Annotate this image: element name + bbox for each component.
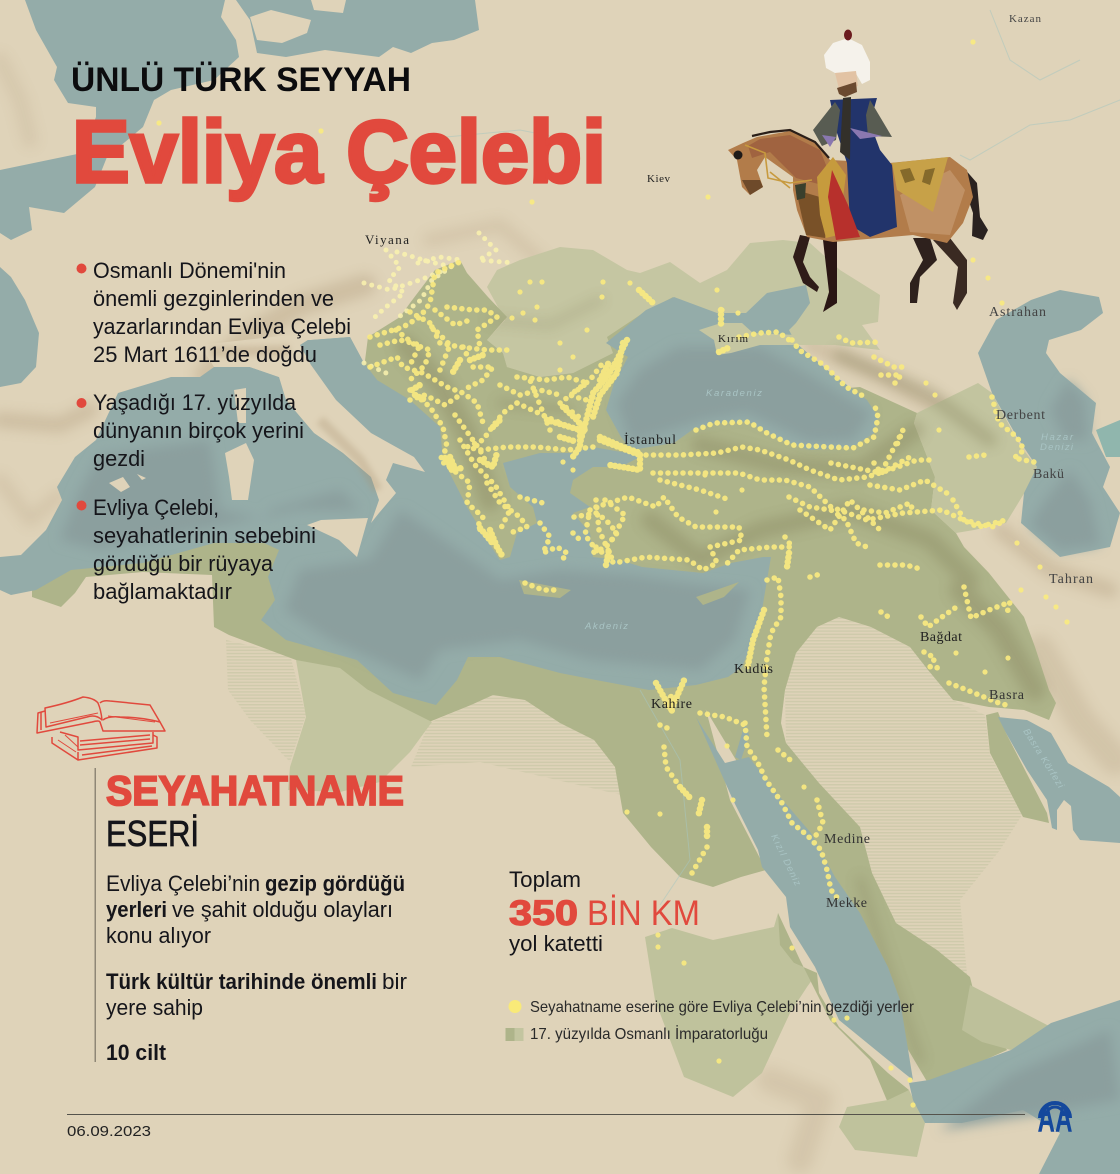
label: Basra Körfezi: Basra Körfezi xyxy=(1020,727,1066,791)
label: Hazar: Hazar xyxy=(1041,432,1074,443)
callout: total distance: 350 xyxy=(509,894,578,933)
label: Bağdat: Bağdat xyxy=(920,630,962,645)
bullet one xyxy=(93,258,351,367)
label: Akdeniz: Akdeniz xyxy=(584,621,628,632)
bullet two: dünyanın birçok yerini xyxy=(93,418,304,443)
text block: biography bullets xyxy=(76,258,351,604)
rivers and small lakes xyxy=(415,10,1120,905)
Libyan interior xyxy=(288,660,432,792)
turban cap xyxy=(844,30,852,40)
callout: total distance: Toplam xyxy=(509,867,581,892)
label: İstanbul: İstanbul xyxy=(624,432,676,448)
Caspian Sea xyxy=(978,290,1120,557)
divider: vertical rule xyxy=(94,768,96,1062)
date: 06.09.2023 xyxy=(67,1123,151,1140)
bridle xyxy=(745,145,812,188)
dotted routes xyxy=(370,262,1039,900)
label: Mekke: Mekke xyxy=(826,896,867,911)
heading: ESERİ: ESERİ xyxy=(106,813,199,854)
label: Basra: Basra xyxy=(989,688,1025,703)
bullet one: önemli gezginlerinden ve xyxy=(93,286,334,311)
Baltic Sea xyxy=(236,0,479,57)
Caucasus lighter zone xyxy=(914,383,1037,533)
terrain shading on empire xyxy=(405,300,1035,1060)
text block: Seyahatname description xyxy=(106,871,407,1065)
label: Viyana: Viyana xyxy=(365,232,409,247)
label: Tahran: Tahran xyxy=(1049,572,1093,587)
text block: Seyahatname description: ve şahit olduğu olayları xyxy=(172,897,393,922)
front legs xyxy=(793,235,819,292)
label: Kiev: Kiev xyxy=(647,173,670,185)
Mediterranean Sea xyxy=(0,337,771,705)
stripes: desert hatching xyxy=(226,617,1022,985)
bullet one: 25 Mart 1611’de doğdu xyxy=(93,342,317,367)
beard xyxy=(837,82,857,97)
tail xyxy=(963,167,988,240)
turban xyxy=(824,38,870,84)
bullet two: Yaşadığı 17. yüzyılda xyxy=(93,390,297,415)
text block: Seyahatname description: 10 cilt xyxy=(106,1040,167,1065)
legend: empire swatch xyxy=(506,1028,524,1041)
North Sea and Channel xyxy=(0,0,239,240)
Bay of Biscay xyxy=(0,267,39,387)
text block: Seyahatname description: yerleri xyxy=(106,897,167,922)
bullet one: Osmanlı Dönemi'nin xyxy=(93,258,286,283)
heading: SEYAHATNAME: SEYAHATNAME xyxy=(106,767,404,814)
bullet one: yazarlarından Evliya Çelebi xyxy=(93,314,351,339)
hind legs xyxy=(910,238,937,303)
bullet two xyxy=(93,390,304,471)
face xyxy=(835,71,858,93)
sash xyxy=(840,97,851,160)
Somaliland xyxy=(839,1090,925,1157)
blanket xyxy=(892,157,948,212)
legend: yellow dot label: Seyahatname eserine göre Evliya Çelebi’nin gezdiği yerler xyxy=(530,999,915,1016)
icon: books xyxy=(37,697,165,760)
North Africa coast xyxy=(32,530,766,887)
label: Denizi: Denizi xyxy=(1040,442,1074,453)
single scattered points xyxy=(159,42,1067,1105)
legend: empire label: 17. yüzyılda Osmanlı İmparatorluğu xyxy=(530,1024,768,1043)
bullet three: gördüğü bir rüyaya xyxy=(93,551,274,576)
logo: Anadolu Agency: AA xyxy=(1038,1098,1072,1141)
label: Medine: Medine xyxy=(824,832,870,847)
saddle xyxy=(817,157,846,238)
eye xyxy=(734,150,742,160)
land over water: Italy, islands xyxy=(109,0,425,557)
callout: total distance xyxy=(509,867,700,956)
Yemen xyxy=(962,985,1051,1050)
label: Bakü: Bakü xyxy=(1033,467,1064,482)
bullet marker xyxy=(76,398,86,408)
bullet three: seyahatlerinin sebebini xyxy=(93,523,316,548)
horse body xyxy=(728,131,973,243)
left sleeve xyxy=(813,102,840,146)
text block: Seyahatname description: gezip gördüğü xyxy=(265,871,405,896)
Gulf of Aqaba xyxy=(735,723,749,760)
title: subheading: ÜNLÜ TÜRK SEYYAH xyxy=(71,61,411,99)
label: Karadeniz: Karadeniz xyxy=(706,388,762,399)
bullet marker xyxy=(76,500,86,510)
label: Derbent: Derbent xyxy=(996,408,1045,423)
Kara-Bogaz lagoon xyxy=(1096,420,1120,457)
illustration: horseman xyxy=(728,30,988,312)
Crimea xyxy=(699,323,800,355)
Persian Gulf xyxy=(998,717,1120,843)
Black Sea xyxy=(606,285,878,450)
label: Kazan: Kazan xyxy=(1009,13,1042,25)
cuffs xyxy=(822,128,882,147)
text block: Seyahatname description: bir xyxy=(382,969,407,994)
label: Kahire: Kahire xyxy=(651,697,692,712)
label: Astrahan: Astrahan xyxy=(989,305,1046,320)
bullet three xyxy=(93,495,316,604)
deeper water basins xyxy=(60,347,1120,1130)
text block: Seyahatname description: Evliya Çelebi’nin xyxy=(106,871,260,896)
robe xyxy=(830,98,897,237)
mane xyxy=(752,130,829,158)
route dots: Seyahatname travel points xyxy=(159,42,1067,1105)
text block: Seyahatname description: Türk kültür tarihinde önemli xyxy=(106,969,377,994)
Red Sea xyxy=(696,717,913,1080)
right sleeve xyxy=(866,100,892,137)
red cloth xyxy=(828,170,860,240)
label: Kızıl Deniz: Kızıl Deniz xyxy=(768,832,803,888)
callout: total distance: yol katetti xyxy=(509,931,603,956)
Adriatic fix: upper Adriatic water xyxy=(311,337,377,385)
land over water: green islands xyxy=(519,580,739,605)
vassal territory north of Black Sea xyxy=(487,240,880,377)
text block: Seyahatname description: konu alıyor xyxy=(106,923,211,948)
bullet three: bağlamaktadır xyxy=(93,579,232,604)
label: Kırım: Kırım xyxy=(718,333,748,345)
Eritrea coast xyxy=(778,913,909,1103)
dense beaded routes xyxy=(412,290,789,840)
map labels xyxy=(365,13,1093,911)
main territory: Balkans, Anatolia, Levant, Mesopotamia, Hejaz xyxy=(360,260,1056,1085)
footer rule xyxy=(67,1114,1025,1115)
Sudan xyxy=(645,913,817,1097)
bullet two: gezdi xyxy=(93,446,145,471)
legend xyxy=(506,999,915,1043)
route dots: paler points over Central Europe xyxy=(364,233,514,373)
neck and shoulder mottling xyxy=(748,135,826,185)
title: main name: Evliya Çelebi xyxy=(72,102,606,201)
text block: Seyahatname description: yere sahip xyxy=(106,995,203,1020)
Gulf of Aden xyxy=(909,1000,1120,1174)
legend: yellow dot xyxy=(508,1000,522,1013)
Persian Gulf west shore xyxy=(986,712,1049,823)
bullet marker xyxy=(76,264,86,274)
terrain on Italy xyxy=(210,350,378,490)
label: Kudüs: Kudüs xyxy=(734,662,773,677)
bullet three: Evliya Çelebi, xyxy=(93,495,219,520)
panel: Ottoman Empire territory xyxy=(32,240,1056,1157)
callout: total distance: BİN KM xyxy=(587,894,700,933)
logo: Anadolu Agency xyxy=(1038,1098,1072,1141)
